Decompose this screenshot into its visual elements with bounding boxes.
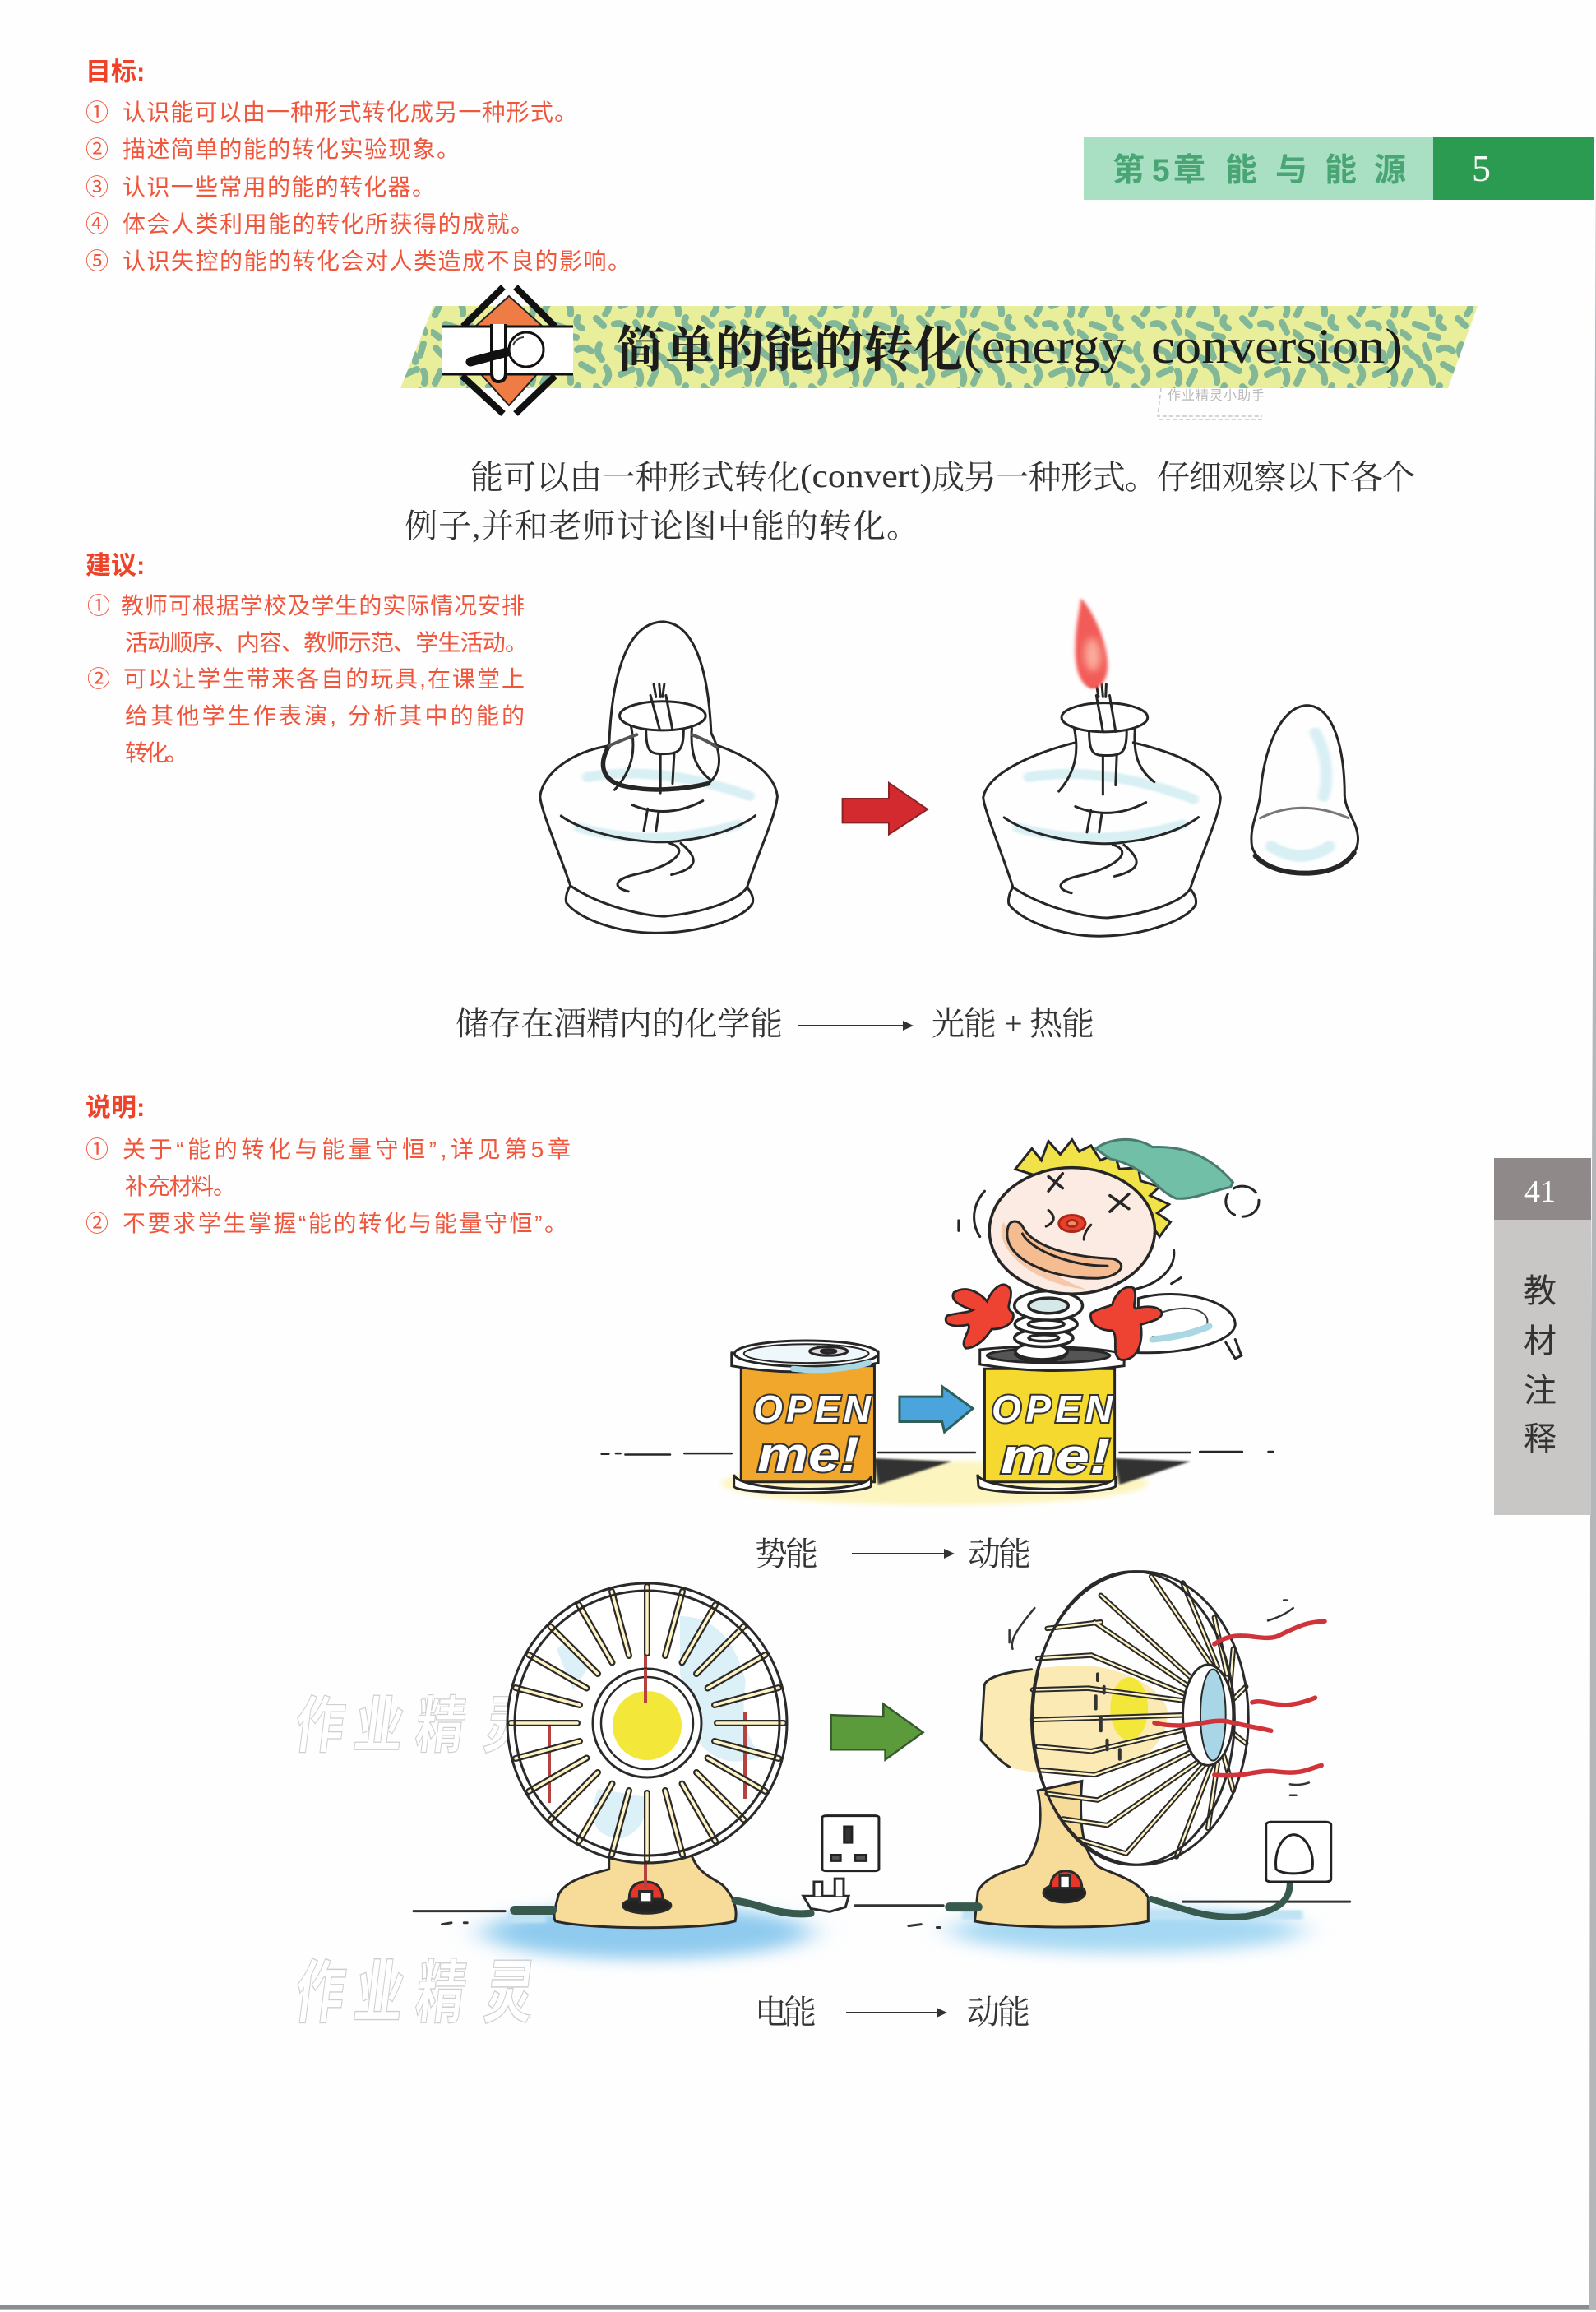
alcohol lamp illustration: [540, 598, 1358, 936]
flame: [1076, 598, 1108, 689]
formula: potential to kinetic: [755, 1536, 1031, 1573]
arrow: blue: [900, 1387, 973, 1432]
body paragraph: 能可以由一种形式转化: [470, 459, 800, 496]
fan off cord and plug: [515, 1879, 849, 1914]
lid: [1138, 1295, 1242, 1359]
watermark stamp: [1158, 388, 1265, 419]
watermark lower left: 作业精灵: [291, 1954, 539, 2032]
formula: electric to kinetic: 动能: [967, 1994, 1030, 2031]
notes panel: [86, 1093, 571, 1236]
gloves: [946, 1285, 1162, 1360]
can label closed: me!: [757, 1427, 859, 1482]
objectives list: ②: [86, 137, 109, 162]
notes list: ①: [86, 1137, 109, 1162]
can label closed: OPEN: [753, 1388, 872, 1430]
objectives list: ③: [86, 174, 109, 200]
can label open: me!: [1001, 1429, 1110, 1484]
formula: electric to kinetic: [755, 1994, 1030, 2031]
moving air lines: [1010, 1600, 1325, 1795]
objectives list: ⑤: [86, 248, 109, 274]
objectives list: ①: [86, 100, 109, 125]
suggestions list: [87, 593, 528, 766]
section title text: (energy: [964, 319, 1126, 373]
notes list: 关于“能的转化与能量守恒”,详见第5章: [123, 1137, 571, 1162]
section title text: conversion): [1151, 319, 1403, 373]
objectives list: [86, 100, 631, 274]
spring: [1015, 1291, 1083, 1361]
floor wash: [483, 1906, 1302, 1959]
page bottom edge: [0, 2305, 1589, 2309]
objectives list: 认识失控的能的转化会对人类造成不良的影响。: [123, 248, 631, 274]
suggestions list: 教师可根据学校及学生的实际情况安排: [121, 593, 525, 619]
suggestions list: 可以让学生带来各自的玩具,在课堂上: [123, 666, 525, 692]
objectives list: ④: [86, 211, 109, 237]
can label open: OPEN: [992, 1388, 1113, 1430]
vertical section label: 材: [1524, 1323, 1557, 1360]
objectives list: 认识能可以由一种形式转化成另一种形式。: [123, 100, 577, 125]
wall socket open: [822, 1816, 879, 1871]
floor lines: [414, 1902, 1350, 1927]
chapter number: 5: [1472, 147, 1491, 189]
suggestions list: ①: [87, 593, 110, 619]
formula: potential to kinetic: 势能: [755, 1536, 818, 1573]
fan off stand: [554, 1837, 736, 1928]
page number: 41: [1524, 1175, 1556, 1209]
body paragraph: (convert): [800, 457, 932, 494]
can label closed: [753, 1388, 872, 1482]
notes list: 补充材料。: [125, 1174, 236, 1199]
objectives list: 体会人类利用能的转化所获得的成就。: [123, 211, 534, 237]
side tab: [1494, 1158, 1591, 1515]
vertical section label: 教: [1524, 1273, 1557, 1309]
objectives list: 认识一些常用的能的转化器。: [123, 174, 435, 200]
chapter banner: [1084, 137, 1594, 200]
notes heading: 说明:: [86, 1093, 145, 1122]
can open: [978, 1347, 1191, 1493]
glass cap removed: [1251, 706, 1358, 873]
notes list: [86, 1137, 571, 1236]
suggestions heading: 建议:: [86, 551, 145, 580]
clown head: [959, 1139, 1259, 1294]
objectives list: 描述简单的能的转化实验现象。: [123, 137, 460, 162]
formula: chemical to light and heat: 储存在酒精内的化学能: [456, 1005, 783, 1042]
suggestions list: 活动顺序、内容、教师示范、学生活动。: [125, 630, 528, 656]
suggestions panel: [86, 551, 528, 766]
vertical section label: 释: [1524, 1421, 1557, 1457]
vertical section label: 注: [1524, 1373, 1557, 1409]
fan illustrations: [414, 1572, 1350, 1959]
suggestions list: ②: [87, 666, 110, 692]
body paragraph: [405, 457, 1415, 544]
formula: chemical to light and heat: 光能+热能: [932, 1005, 1094, 1042]
formula: potential to kinetic: 动能: [968, 1536, 1031, 1573]
lit lamp: [983, 684, 1220, 936]
section title text: [616, 319, 1403, 378]
arrow: green: [831, 1704, 923, 1760]
vertical section label: [1524, 1273, 1557, 1457]
formula: electric to kinetic: 电能: [755, 1994, 817, 2031]
fan on stand: [974, 1666, 1168, 1927]
lamp with cap: [540, 622, 777, 933]
section title band: [400, 287, 1478, 419]
arrow: red: [843, 783, 928, 835]
icon: magnifier diamond: [442, 287, 573, 414]
chapter title: 第5章能与能源: [1113, 153, 1406, 188]
formula: chemical to light and heat: [456, 1005, 1094, 1042]
fan on cage: [1031, 1572, 1248, 1865]
body paragraph: 成另一种形式。仔细观察以下各个: [932, 459, 1415, 496]
can closed: [732, 1341, 951, 1493]
suggestions list: 转化。: [125, 740, 188, 766]
body paragraph: 例子,并和老师讨论图中能的转化。: [405, 507, 919, 544]
watermark lower left: 作业精灵: [291, 1692, 538, 1760]
floor: [602, 1452, 1273, 1505]
notes list: ②: [86, 1211, 109, 1236]
watermark lower left: [291, 1692, 539, 2032]
jack in the box illustration: [602, 1139, 1273, 1505]
watermark stamp: 作业精灵小助手: [1168, 388, 1265, 403]
section title text: 简单的能的转化: [616, 323, 963, 378]
objectives panel: [86, 58, 631, 274]
fan on cord and socket: [950, 1822, 1331, 1917]
can label open: [992, 1388, 1113, 1484]
objectives heading: 目标:: [86, 58, 145, 86]
notes list: 不要求学生掌握“能的转化与能量守恒”。: [123, 1211, 567, 1236]
suggestions list: 给其他学生作表演, 分析其中的能的: [125, 703, 525, 729]
fan off blades and guard: [507, 1583, 787, 1888]
